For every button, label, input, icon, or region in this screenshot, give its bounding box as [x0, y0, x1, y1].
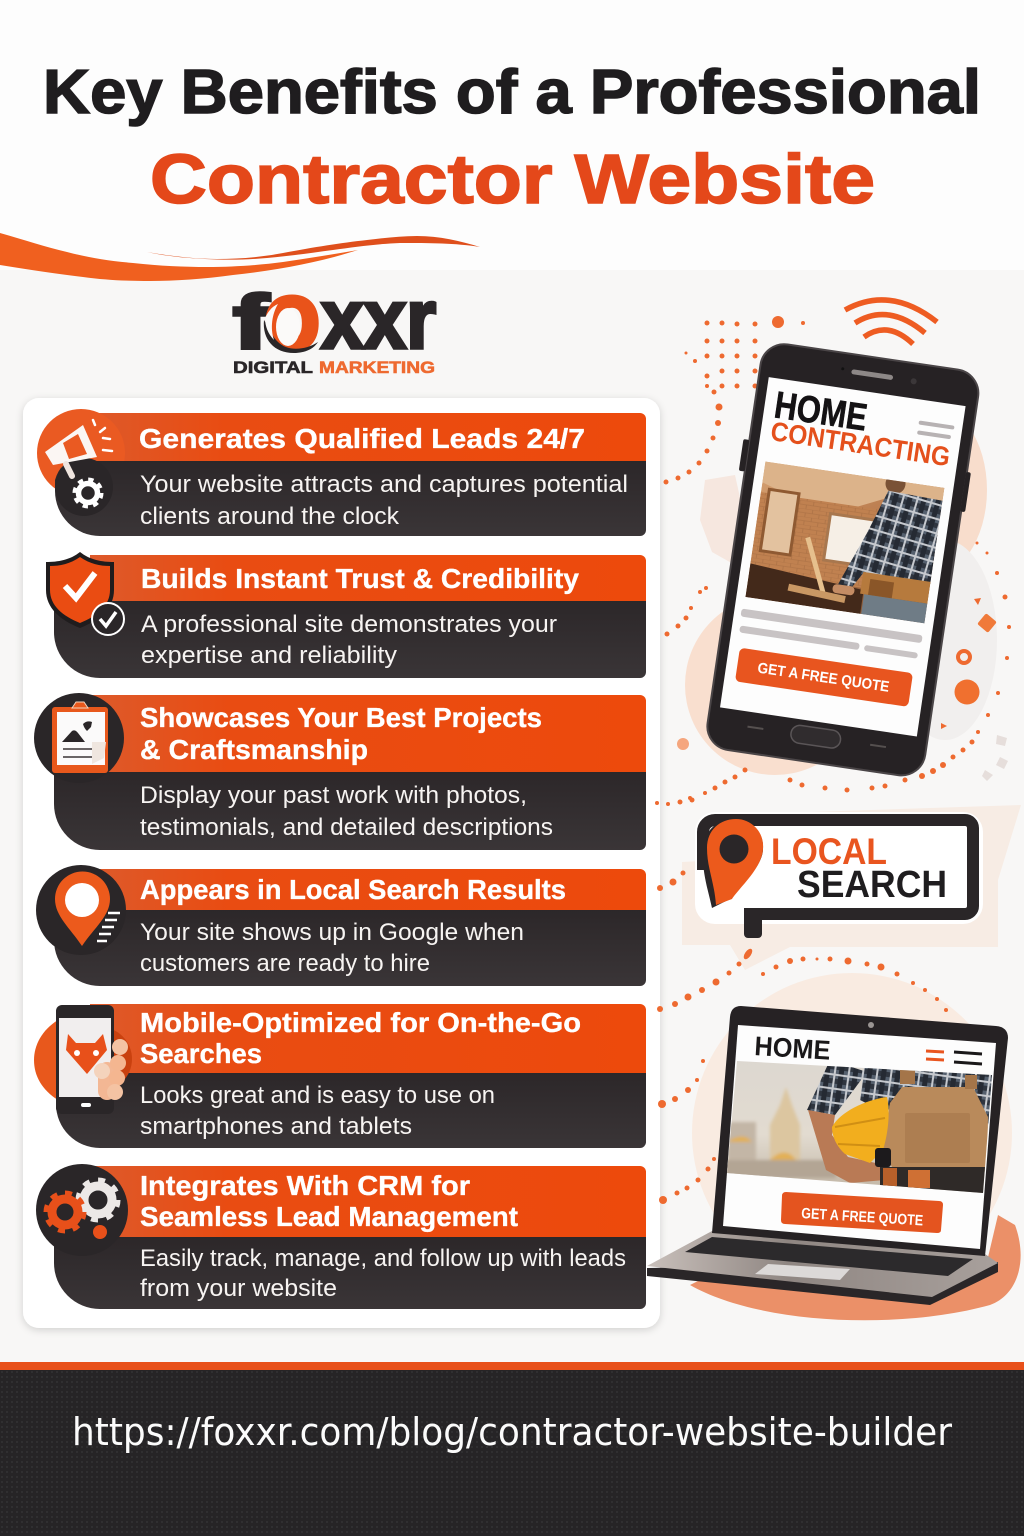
benefit 4: appears in local search: Appears in Local Search Results: [140, 874, 566, 905]
benefit 2: builds instant trust: Builds Instant Trust & Credibility: [141, 563, 580, 594]
bubble outline: [703, 820, 973, 914]
laptop webcam: [868, 1022, 874, 1028]
icon: wifi signal: [845, 300, 937, 344]
benefit 5: mobile optimized: Mobile-Optimized for On-the-Go: [140, 1007, 581, 1038]
benefit 3: showcases best projects: [34, 693, 646, 850]
icon: gears: [36, 1164, 128, 1256]
icon: shield with check: [46, 552, 124, 635]
benefit 4: appears in local search: customers are ready to hire: [140, 950, 430, 977]
local search text: [771, 831, 947, 906]
phone speaker and camera: [841, 367, 917, 385]
laptop trackpad: [755, 1264, 850, 1280]
phone heading: HOME: [772, 384, 870, 440]
icon: map pin: [36, 865, 126, 955]
benefit 5: mobile optimized: Searches: [140, 1038, 262, 1069]
phone screen: [720, 377, 966, 736]
orange dotted trails around phone: [664, 316, 1011, 800]
laptop screen lid: [712, 1006, 1008, 1256]
benefit 2: builds instant trust: expertise and reliability: [141, 642, 398, 669]
benefit 1: generates qualified leads: Your website attracts and captures potential: [140, 471, 628, 498]
phone menu lines: [917, 420, 955, 440]
footer url: https://foxxr.com/blog/contractor-website-builder: [72, 1410, 952, 1454]
benefit 6: integrates with CRM: from your website: [140, 1275, 337, 1302]
benefit 5: mobile optimized: Looks great and is easy to use on: [140, 1082, 495, 1109]
laptop keyboard: [685, 1237, 973, 1276]
button: get a free quote: GET A FREE QUOTE: [756, 660, 890, 696]
benefit 4: appears in local search: [36, 865, 646, 986]
decorative blobs behind phone: [685, 400, 1008, 781]
title: [43, 58, 981, 218]
phone home button: [746, 718, 887, 756]
pale bubble backdrop: [682, 805, 1021, 970]
local search text: SEARCH: [797, 864, 947, 906]
laptop base: [647, 1231, 998, 1305]
benefit 5: mobile optimized: [34, 1004, 646, 1148]
logo o swirl: [264, 304, 318, 353]
laptop menu icon: [926, 1051, 982, 1064]
benefit 5: mobile optimized: smartphones and tablets: [140, 1113, 412, 1140]
logo: foxxr digital marketing: f: [233, 280, 270, 365]
logo: foxxr digital marketing: xxr: [321, 272, 436, 366]
laptop mockup: [647, 1006, 1008, 1305]
photo: worker holding hard hat: [727, 1061, 992, 1193]
title: Key Benefits of a Professional: [43, 58, 981, 127]
bubble tail: [744, 914, 762, 938]
icon: phone in hand with fox: [34, 1005, 132, 1114]
icon: location pin: [703, 819, 763, 908]
benefit 4: appears in local search: Your site shows up in Google when: [140, 919, 524, 946]
decorative blobs behind laptop: [690, 973, 1021, 1320]
logo: foxxr digital marketing: DIGITAL: [233, 358, 313, 377]
icon: megaphone and gear: [37, 409, 646, 536]
orange dotted trails around laptop: [655, 798, 948, 1204]
phone text placeholder lines: [738, 609, 923, 659]
benefit 1: generates qualified leads: clients around the clock: [140, 503, 400, 530]
icon: project clipboard: [34, 693, 124, 783]
phone mockup: [698, 340, 986, 779]
phone body: [704, 341, 982, 779]
phone heading: CONTRACTING: [769, 416, 952, 472]
benefit 3: showcases best projects: testimonials, and detailed descriptions: [140, 814, 553, 841]
benefit 6: integrates with CRM: Integrates With CRM for: [140, 1170, 470, 1201]
logo: foxxr digital marketing: o: [262, 260, 322, 374]
button: get a free quote: GET A FREE QUOTE: [801, 1205, 924, 1229]
photo: contractor at work: [745, 455, 945, 623]
benefit 1: generates qualified leads: Generates Qualified Leads 24/7: [139, 423, 585, 454]
footer accent line: [0, 1362, 1024, 1370]
panel: benefits card: [23, 398, 660, 1328]
benefit 1: generates qualified leads: [37, 409, 646, 536]
title: Contractor Website: [150, 140, 875, 218]
logo: foxxr digital marketing: [233, 260, 436, 377]
button: get a free quote: [735, 648, 913, 707]
benefit 6: integrates with CRM: [36, 1164, 646, 1309]
laptop display: [720, 1025, 1000, 1249]
button: get a free quote: [781, 1192, 943, 1233]
phone heading: [769, 384, 957, 472]
footer band: [0, 1370, 1024, 1536]
local search text: LOCAL: [771, 831, 887, 872]
benefit 3: showcases best projects: & Craftsmanship: [140, 734, 368, 765]
benefit 2: builds instant trust: A professional site demonstrates your: [141, 611, 557, 638]
benefit 3: showcases best projects: Showcases Your Best Projects: [140, 702, 542, 733]
logo: foxxr digital marketing: MARKETING: [319, 358, 435, 377]
orange swoosh: [0, 233, 480, 281]
benefit 3: showcases best projects: Display your past work with photos,: [140, 782, 527, 809]
benefit 6: integrates with CRM: Seamless Lead Management: [140, 1201, 518, 1232]
local search bubble: [682, 805, 1021, 970]
benefit 6: integrates with CRM: Easily track, manage, and follow up with leads: [140, 1245, 626, 1272]
benefit 2: builds instant trust: [46, 552, 646, 678]
laptop heading: HOME: [754, 1031, 831, 1066]
